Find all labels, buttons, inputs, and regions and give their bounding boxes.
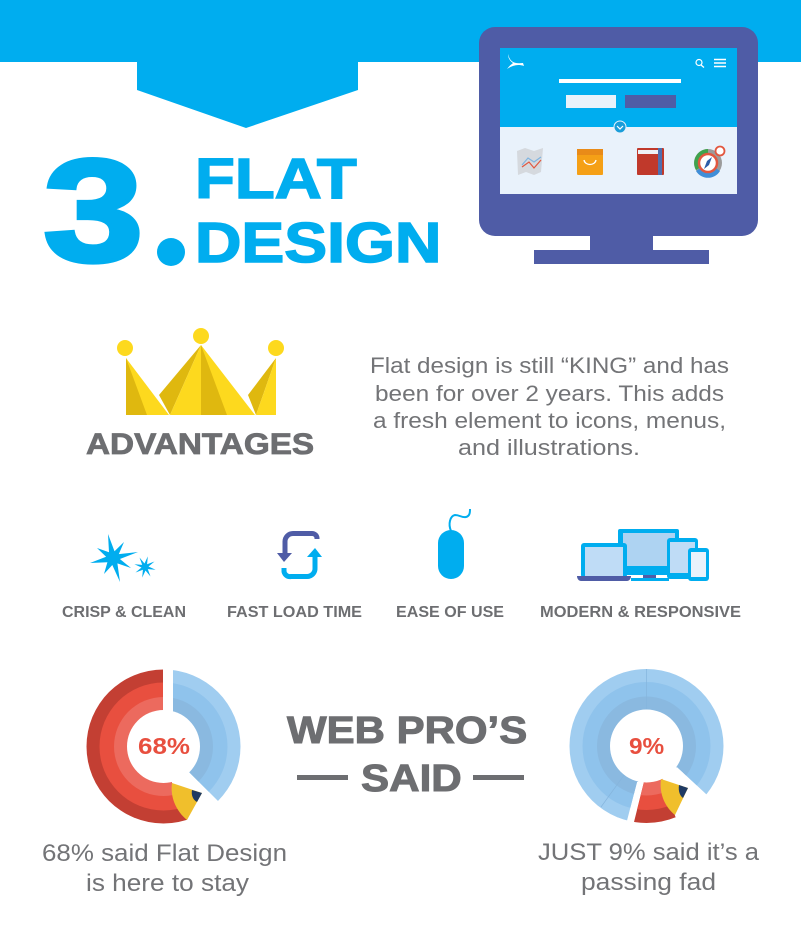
heading: web pros said (287, 710, 527, 800)
heading: flat design (195, 147, 441, 274)
heading: web pros said: WEB PRO’S (287, 710, 527, 752)
heading: flat design: FLAT (195, 147, 357, 210)
icon: mouse (438, 509, 470, 579)
caption: 9 percent: passing fad (581, 869, 716, 896)
caption: 68 percent: is here to stay (86, 870, 250, 897)
icon: crown (117, 328, 284, 415)
text block: intro: Flat design is still “KING” and has (370, 353, 729, 378)
text block: intro: a fresh element to icons, menus, (373, 408, 726, 433)
text block: intro: been for over 2 years. This adds (375, 381, 724, 406)
text block: intro: and illustrations. (458, 435, 640, 460)
heading: flat design: DESIGN (195, 210, 441, 274)
icon: sparkle (90, 534, 156, 582)
caption: 9 percent: JUST 9% said it’s a (538, 839, 759, 866)
value: 9 percent: 9% (629, 735, 664, 760)
heading: advantages: ADVANTAGES (86, 427, 314, 461)
value: 68 percent: 68% (138, 734, 190, 760)
caption: 68 percent: 68% said Flat Design (42, 840, 287, 867)
top banner (0, 0, 801, 128)
caption: 9 percent (538, 839, 759, 896)
label: ease of use: EASE OF USE (396, 604, 504, 621)
icon: responsive devices (577, 529, 709, 581)
caption: 68 percent (42, 840, 287, 897)
donut chart: 68 percent (86, 670, 240, 824)
heading: web pros said: SAID (361, 757, 462, 800)
text block: intro (370, 353, 729, 460)
label: fast load time: FAST LOAD TIME (227, 604, 362, 621)
heading number: 3.: 3 (43, 129, 144, 292)
icon: refresh arrows (277, 533, 322, 577)
monitor illustration (479, 27, 758, 264)
donut chart: 9 percent (570, 669, 724, 823)
label: modern and responsive: MODERN & RESPONSIVE (540, 604, 741, 621)
label: crisp and clean: CRISP & CLEAN (62, 604, 186, 621)
